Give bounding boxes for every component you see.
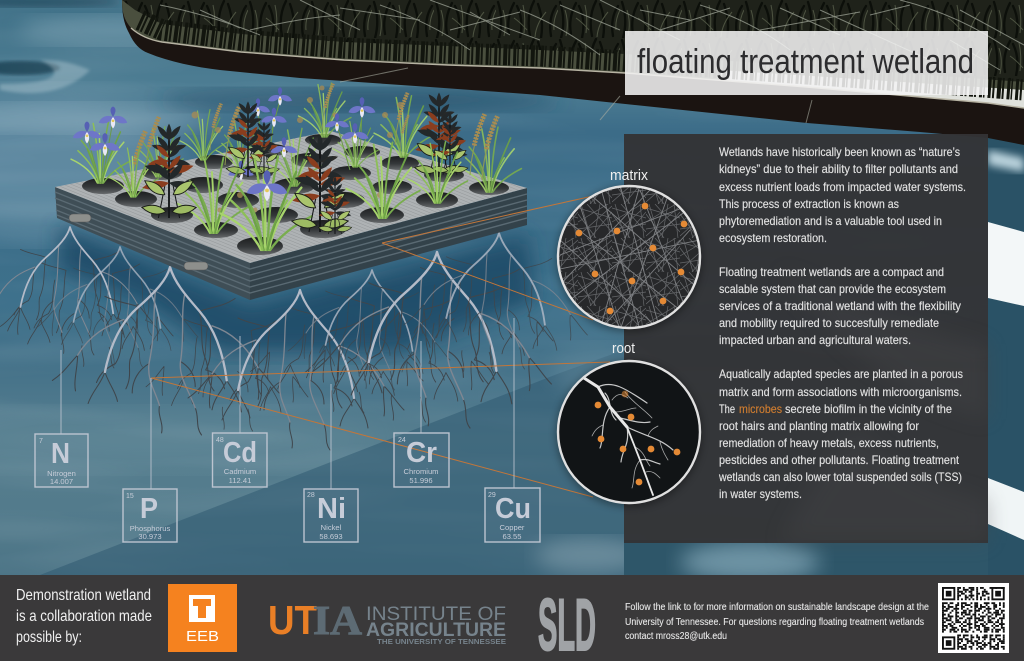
matrix detail circle xyxy=(555,183,705,333)
paragraph 2: scalable system that can provide the ecosystem xyxy=(719,282,946,296)
paragraph 1: ecosystem restoration. xyxy=(719,231,827,245)
microbes in matrix xyxy=(576,203,687,314)
root detail circle xyxy=(556,361,702,507)
element: chromium: Chromium xyxy=(403,467,439,476)
logo: EEB xyxy=(168,584,237,652)
paragraph 2: impacted urban and agricultural waters. xyxy=(719,333,911,347)
element: phosphorus: P xyxy=(140,493,158,525)
callout lines to detail circles xyxy=(151,196,610,497)
matrix label: matrix xyxy=(610,167,648,184)
tan plumes xyxy=(130,84,497,212)
logo: UTIA Institute of Agriculture: IA xyxy=(313,597,362,643)
wetland plants xyxy=(71,83,521,250)
text panel background xyxy=(624,134,988,543)
paragraph 1: phytoremediation and is a valuable tool used in xyxy=(719,214,942,228)
platform right side xyxy=(250,188,527,300)
element: copper: Copper xyxy=(500,523,525,532)
back grasses xyxy=(134,83,521,192)
element: chromium: Cr xyxy=(406,437,437,469)
floating platform xyxy=(55,131,527,300)
footer collaboration text: possible by: xyxy=(16,629,82,646)
dark foliage back xyxy=(226,92,468,177)
front grasses xyxy=(109,142,468,250)
footer collaboration text: Demonstration wetland xyxy=(16,587,151,604)
logo: UTIA Institute of Agriculture: UT xyxy=(268,597,317,643)
element: chromium: 51.996 xyxy=(409,476,433,485)
element: nickel: Ni xyxy=(317,493,346,525)
iris clumps xyxy=(71,87,375,183)
paragraph 2: and mobility required to succesfully remediate xyxy=(719,316,939,330)
footer contact text xyxy=(625,601,929,642)
footer collaboration text xyxy=(16,587,152,646)
title: floating treatment wetland xyxy=(637,43,974,81)
paragraph 3 xyxy=(718,367,963,501)
dark foliage front xyxy=(141,124,352,234)
QR code xyxy=(938,583,1009,653)
logo: EEB: EEB xyxy=(186,628,219,645)
logo: UTIA Institute of Agriculture: INSTITUTE OF xyxy=(366,604,506,625)
element leader lines xyxy=(61,318,514,489)
paragraph 3: in water systems. xyxy=(719,487,802,501)
paragraph 3: The xyxy=(719,402,735,416)
element: chromium: 24 xyxy=(398,437,406,444)
element: copper: 63.55 xyxy=(502,532,522,541)
paragraph 1: Wetlands have historically been known as “nature’s xyxy=(719,145,960,159)
paragraph 1: kidneys” due to their ability to filter pollutants and xyxy=(719,162,958,176)
paragraph 1 xyxy=(719,145,966,245)
paragraph 1: excess nutrient loads from impacted water systems. xyxy=(719,180,966,194)
footer band xyxy=(0,575,1024,661)
element: phosphorus: 30.973 xyxy=(138,532,162,541)
logo: UTIA Institute of Agriculture xyxy=(268,597,506,646)
element: nickel: 58.693 xyxy=(319,532,343,541)
paragraph 2 xyxy=(719,265,961,347)
element: phosphorus: 15 xyxy=(126,493,134,500)
footer contact text: contact mross28@utk.edu xyxy=(625,630,727,642)
plant roots xyxy=(0,227,587,450)
paragraph 3: Aquatically adapted species are planted in a porous xyxy=(719,367,963,381)
floating island bank with vegetation xyxy=(120,0,1024,145)
platform left side xyxy=(55,187,250,300)
platform top surface xyxy=(55,131,527,263)
footer collaboration text: is a collaboration made xyxy=(16,608,152,625)
element: cadmium: 112.41 xyxy=(229,476,251,485)
paragraph 3: microbes xyxy=(739,402,782,416)
platform shadow xyxy=(60,225,535,352)
element: nitrogen xyxy=(35,434,88,487)
paragraph 3: matrix and form associations with microorganisms. xyxy=(719,385,962,399)
connector pins xyxy=(69,214,208,270)
element: nickel: 28 xyxy=(307,492,315,499)
element: cadmium: 48 xyxy=(216,437,224,444)
paragraph 3: root hairs and planting matrix allowing for xyxy=(719,419,919,433)
paragraph 3: wetlands can also lower total suspended soils (TSS) xyxy=(718,470,962,484)
element: cadmium: Cd xyxy=(223,437,257,469)
element: nitrogen: N xyxy=(51,438,70,470)
element: copper: 29 xyxy=(488,492,496,499)
body text xyxy=(718,145,966,501)
planting holes xyxy=(82,134,509,255)
element: nitrogen: 7 xyxy=(39,438,43,445)
footer contact text: University of Tennessee. For questions regarding floating treatment wetlands xyxy=(625,616,924,628)
element: nitrogen: 14.007 xyxy=(50,477,73,486)
element: phosphorus xyxy=(123,489,177,542)
paragraph 3: pesticides and other pollutants. Floating treatment xyxy=(719,453,960,467)
element: nitrogen: Nitrogen xyxy=(47,469,76,478)
element: nickel: Nickel xyxy=(321,523,342,532)
element: copper: Cu xyxy=(495,493,531,525)
element: copper xyxy=(485,488,540,542)
paragraph 3: remediation of heavy metals, excess nutrients, xyxy=(719,436,939,450)
paragraph 2: services of a traditional wetland with the flexibility xyxy=(719,299,961,313)
title xyxy=(625,31,988,95)
element: cadmium: Cadmium xyxy=(224,467,256,476)
microbes on root xyxy=(595,391,680,485)
root label: root xyxy=(612,340,636,357)
element: cadmium xyxy=(212,433,267,487)
element: nickel xyxy=(304,489,358,542)
element: phosphorus: Phosphorus xyxy=(130,524,170,533)
paragraph 2: Floating treatment wetlands are a compact and xyxy=(719,265,944,279)
element: chromium xyxy=(394,433,449,487)
logo: UTIA Institute of Agriculture: THE UNIVERSITY OF TENNESSEE xyxy=(377,639,506,646)
footer contact text: Follow the link to for more information on sustainable landscape design at the xyxy=(625,601,929,613)
paragraph 3: secrete biofilm in the vicinity of the xyxy=(785,402,952,416)
logo: UTIA Institute of Agriculture: AGRICULTURE xyxy=(366,620,506,641)
paragraph 1: This process of extraction is known as xyxy=(719,197,899,211)
